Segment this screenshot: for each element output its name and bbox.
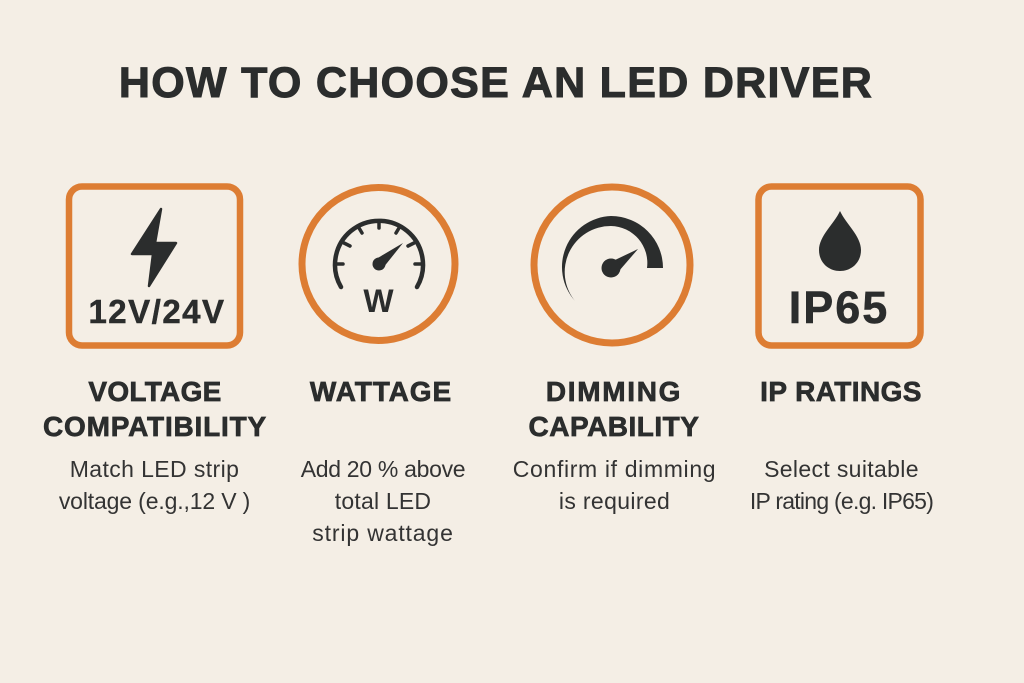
text: ip ratings bbox=[750, 456, 933, 514]
icon: ip rating bbox=[758, 186, 920, 346]
text: wattage: Add 20 % above bbox=[301, 456, 465, 482]
icon: ip rating: IP65 bbox=[789, 282, 889, 333]
text: ip ratings: Select suitable bbox=[764, 456, 919, 482]
heading: dimming: CAPABILITY bbox=[529, 411, 699, 442]
text: dimming: is required bbox=[559, 488, 670, 514]
heading: voltage: VOLTAGE bbox=[88, 376, 222, 407]
heading: dimming: DIMMING bbox=[546, 376, 682, 407]
text: wattage: strip wattage bbox=[312, 520, 454, 546]
text: voltage: Match LED strip bbox=[70, 456, 239, 482]
icon: voltage: 12V/24V bbox=[88, 293, 226, 330]
text: voltage bbox=[59, 456, 250, 514]
heading: ip ratings: IP RATINGS bbox=[760, 376, 922, 407]
text: wattage: total LED bbox=[335, 488, 431, 514]
icon: voltage bbox=[69, 186, 240, 346]
text: wattage bbox=[300, 456, 465, 546]
text: voltage: voltage (e.g.,12 V ) bbox=[59, 488, 250, 514]
heading: wattage: WATTAGE bbox=[310, 376, 452, 407]
icon: wattage: W bbox=[363, 283, 394, 319]
heading: dimming bbox=[529, 376, 699, 442]
text: dimming: Confirm if dimming bbox=[513, 456, 716, 482]
icon: wattage bbox=[302, 188, 455, 340]
icon: dimming bbox=[534, 187, 690, 343]
heading: voltage: COMPATIBILITY bbox=[43, 411, 267, 442]
heading: voltage bbox=[43, 376, 267, 442]
title: HOW TO CHOOSE AN LED DRIVER bbox=[119, 59, 873, 107]
text: dimming bbox=[513, 456, 716, 514]
text: ip ratings: IP rating (e.g. IP65) bbox=[750, 488, 933, 514]
